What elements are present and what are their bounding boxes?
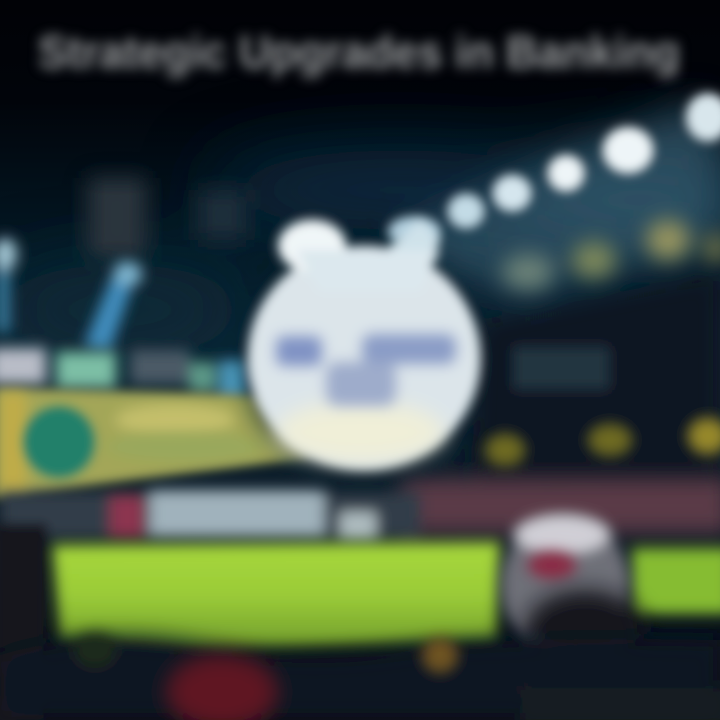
title (blurred): Strategic Upgrades in Banking (38, 26, 680, 78)
background towers (88, 178, 246, 258)
foreground crowd silhouettes (0, 632, 720, 720)
soccer ball (501, 515, 645, 670)
left foreground dark post (0, 525, 46, 720)
green pitch (52, 542, 720, 650)
central emblem: white shield (241, 220, 489, 482)
sky glow (0, 150, 720, 355)
scoreboard panel (512, 346, 610, 390)
dark grandstand (470, 272, 720, 500)
green circular badge (23, 406, 95, 478)
emblem lower cream highlight (276, 402, 444, 462)
right stands (400, 272, 720, 534)
yellow stand lights (485, 418, 720, 466)
left stadium light beams (0, 238, 142, 350)
left signage strip (0, 348, 248, 398)
upper stadium light cluster (388, 93, 720, 300)
yellow-green banner (0, 388, 310, 498)
lower stands strip (0, 490, 420, 540)
crowd red band (400, 478, 720, 534)
emblem blue lettering block (276, 334, 456, 406)
